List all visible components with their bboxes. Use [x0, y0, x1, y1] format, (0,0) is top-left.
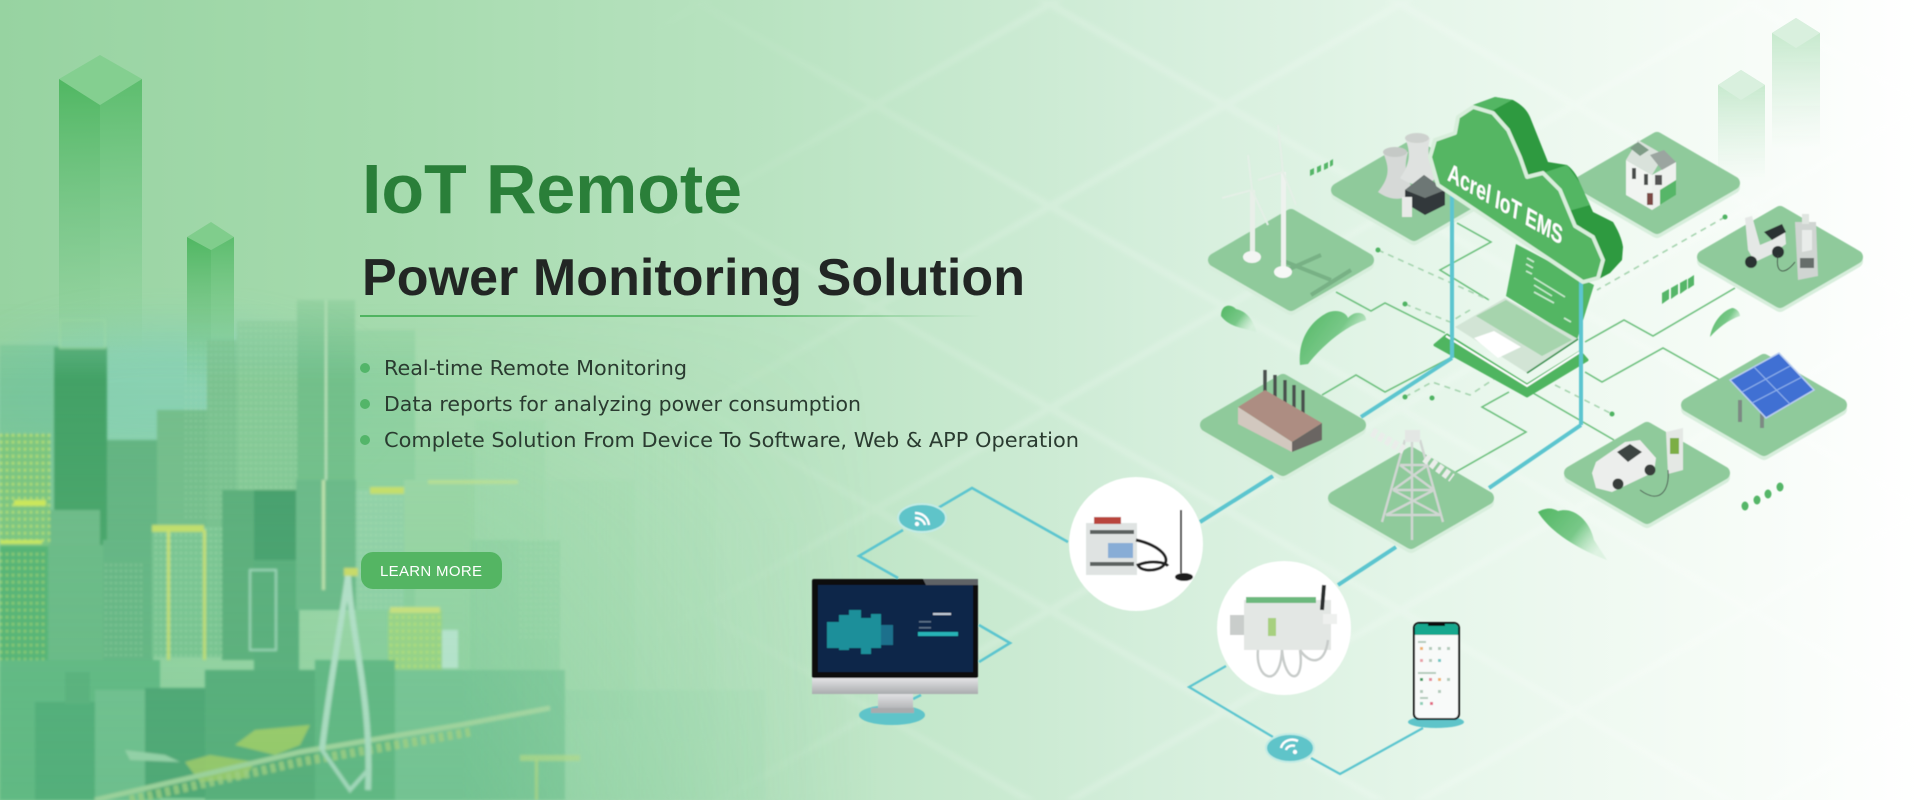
pale towers upper right [1718, 18, 1820, 180]
icon: factory [1238, 370, 1322, 452]
icon: wind turbines [1222, 125, 1296, 278]
tile: factory [1207, 381, 1359, 473]
monitor [812, 579, 978, 725]
wifi node left [898, 504, 946, 532]
screen details [1526, 258, 1571, 322]
laptop on platform [1435, 244, 1594, 396]
cloud: Acrel IoT EMS [1430, 97, 1623, 282]
dash clusters [1310, 159, 1784, 510]
keyboard [1476, 300, 1572, 356]
isometric network diagram [812, 97, 1856, 774]
screen login [918, 613, 958, 636]
glass tower: tall [59, 55, 142, 350]
icon: house [1626, 140, 1676, 210]
haze overlay [0, 464, 776, 800]
line nodes [1376, 214, 1728, 416]
tile: wind farm [1215, 216, 1367, 308]
wifi node right [1266, 734, 1314, 762]
cyan network lines [859, 358, 1581, 774]
cloud label: Acrel IoT EMS [1446, 157, 1565, 250]
circle: meter device [1069, 477, 1203, 611]
bullet 1: Real-time Remote Monitoring [384, 356, 687, 380]
cityscape photo panel [0, 55, 786, 800]
tile: car charging [1571, 429, 1723, 521]
glass tower: short [187, 222, 234, 390]
screen city [827, 610, 893, 654]
icon: transmission tower [1372, 430, 1452, 540]
icon: cooling towers and plant [1378, 133, 1445, 217]
cyan vertical lines [1452, 195, 1581, 425]
circuit lines [1322, 223, 1735, 473]
tile: house [1581, 139, 1733, 231]
bullet list [360, 356, 1079, 452]
tile: transmission [1335, 454, 1487, 546]
trees [1221, 306, 1740, 560]
button: learn more: LEARN MORE [380, 563, 482, 580]
monitor screen [818, 585, 973, 672]
tile: power plant [1338, 146, 1490, 238]
icon: scooter and charger [1745, 214, 1818, 280]
dashed lines [1378, 217, 1725, 414]
icon: solar panels [1730, 353, 1814, 428]
divider [360, 315, 980, 317]
bullet 2: Data reports for analyzing power consumption [384, 392, 861, 416]
phone [1408, 622, 1464, 728]
button: learn more [361, 552, 502, 589]
laptop screen [1506, 244, 1594, 340]
phone app rows [1418, 641, 1450, 705]
tile: solar [1688, 361, 1840, 453]
title: IoT Remote [362, 150, 742, 228]
bullet 3: Complete Solution From Device To Software, Web & APP Operation [384, 428, 1079, 452]
platform [1435, 335, 1587, 396]
subtitle: Power Monitoring Solution [362, 249, 1025, 307]
city buildings [0, 300, 634, 800]
circle: gateway device [1217, 561, 1351, 695]
icon: car and charger [1592, 428, 1683, 496]
trackpad [1474, 331, 1521, 358]
tile: scooter charging [1704, 213, 1856, 305]
laptop base [1455, 298, 1578, 373]
